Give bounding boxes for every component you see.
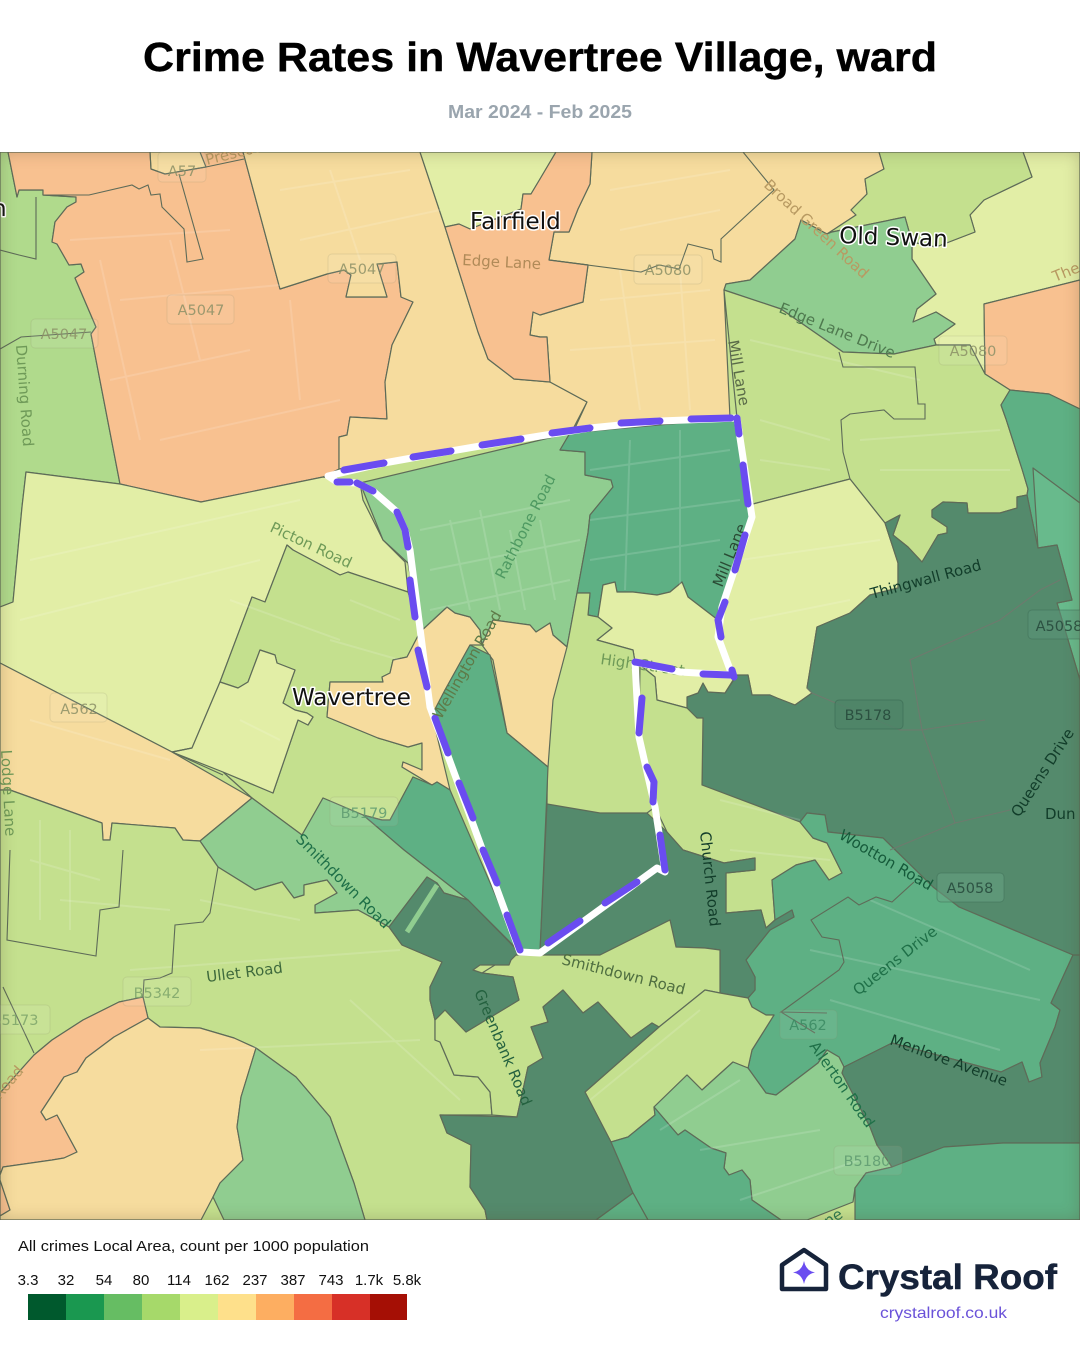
- road names: Ullet Road: [205, 959, 284, 986]
- title: Crime Rates in Wavertree Village, ward: [143, 34, 937, 80]
- road badges: B5180: [844, 1154, 890, 1170]
- map vignette: [0, 152, 1080, 1220]
- road names: Thingwall Road: [867, 556, 983, 603]
- road names: Queens Drive: [1007, 725, 1078, 820]
- title: [143, 34, 937, 122]
- road badges: A5047: [41, 327, 87, 343]
- road names: Edge Lane: [462, 251, 541, 273]
- road names: Broad Green Road: [760, 176, 872, 282]
- road badges: A562: [789, 1018, 827, 1034]
- legend values: 54: [96, 1272, 112, 1289]
- road names: Mill Lane: [724, 339, 753, 407]
- road badges: A5047: [178, 303, 224, 319]
- title: Mar 2024 - Feb 2025: [448, 101, 632, 122]
- road names: Dun: [1045, 805, 1076, 823]
- map: [0, 152, 1080, 1220]
- legend values: 1.7k: [355, 1272, 384, 1289]
- road names: Edge Lane Drive: [777, 299, 898, 362]
- place names: Fairfield: [470, 209, 561, 235]
- road badges: [0, 152, 1080, 1175]
- road badges: A57: [168, 164, 196, 180]
- road names: Allerton Road: [806, 1038, 878, 1131]
- road names beneath ward boundary: Mill Lane: [709, 521, 751, 589]
- icon: house with star: [782, 1250, 826, 1289]
- road names: Smithdown Road: [560, 950, 687, 999]
- road names: Menlove Avenue: [888, 1031, 1010, 1090]
- road names: Rathbone Road: [492, 472, 560, 582]
- legend values: 162: [204, 1272, 230, 1289]
- road names: Smithdown Road: [292, 830, 394, 932]
- place names: Wavertree: [292, 685, 411, 711]
- light strip in south-west dark area: [407, 885, 437, 932]
- road badges: B5178: [845, 708, 891, 724]
- road badges: A5047: [339, 262, 385, 278]
- road names: Greenbank Road: [470, 987, 536, 1108]
- road badges: A562: [60, 702, 98, 718]
- road names: Queens Drive: [849, 922, 941, 999]
- legend title: All crimes Local Area, count per 1000 population: [18, 1238, 369, 1255]
- boundary lines: [0, 152, 1060, 1053]
- road names beneath ward boundary: High Street: [599, 650, 686, 680]
- road badges: A5080: [645, 263, 691, 279]
- road badges: B5179: [341, 806, 387, 822]
- legend values: 114: [167, 1272, 191, 1289]
- website: crystalroof.co.uk: [880, 1305, 1008, 1322]
- road names beneath ward boundary: [599, 521, 751, 680]
- road badges: A5080: [950, 344, 996, 360]
- legend values: 32: [58, 1272, 74, 1289]
- legend values: 237: [242, 1272, 268, 1289]
- road names: Durning Road: [12, 344, 37, 447]
- choropleth regions: [0, 152, 1080, 1220]
- road names: Church Road: [696, 831, 724, 927]
- road badges: B5342: [134, 986, 180, 1002]
- place names: [0, 196, 948, 711]
- legend values: 387: [280, 1272, 306, 1289]
- legend values: 743: [318, 1272, 344, 1289]
- logo wordmark: Crystal Roof: [838, 1258, 1057, 1297]
- legend values: 5.8k: [393, 1272, 422, 1289]
- road names: Wellington Road: [429, 608, 505, 722]
- road badges: A5058: [947, 881, 993, 897]
- street texture: [20, 170, 1040, 1200]
- place names: Old Swan: [839, 223, 948, 253]
- logo: [780, 1248, 1058, 1322]
- legend values: 80: [133, 1272, 149, 1289]
- road names: Wootton Road: [836, 826, 936, 894]
- legend colour scale: [28, 1294, 407, 1320]
- ward boundary: [328, 418, 752, 953]
- legend values: [18, 1272, 422, 1289]
- road names: Picton Road: [267, 518, 355, 572]
- legend: [18, 1238, 422, 1320]
- legend values: 3.3: [18, 1272, 38, 1289]
